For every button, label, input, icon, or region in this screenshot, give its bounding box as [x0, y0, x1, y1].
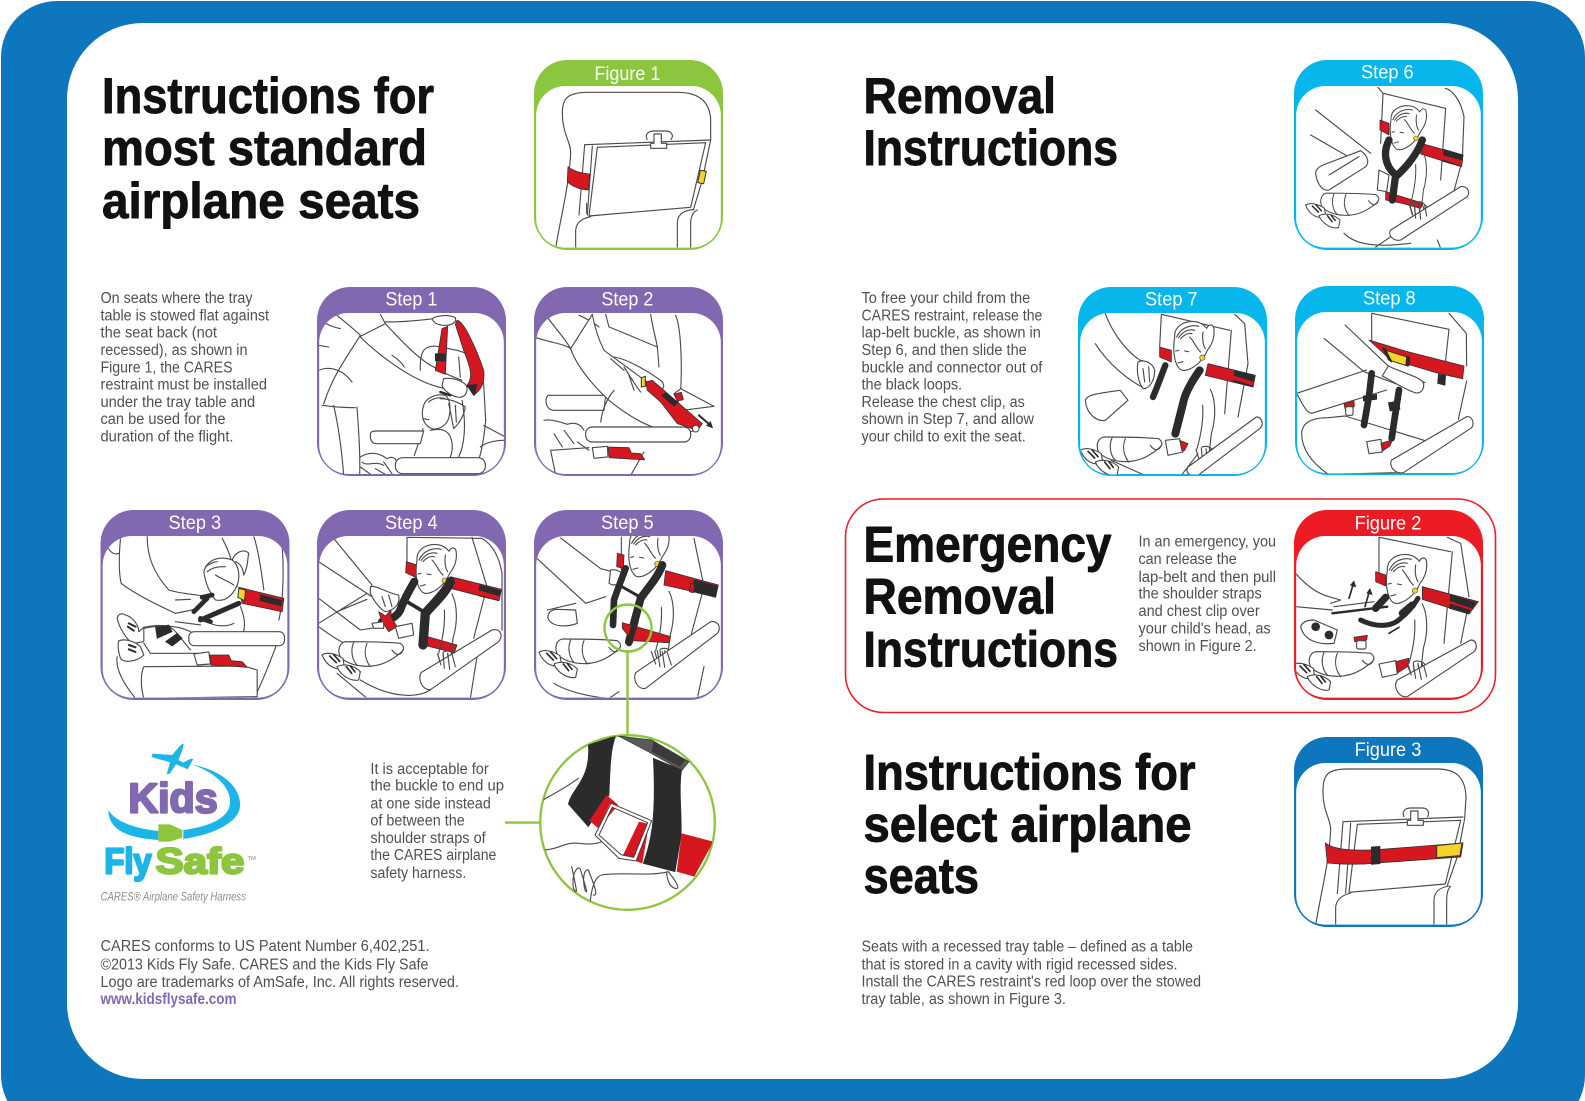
- logo word: Safe: Safe: [156, 840, 244, 881]
- heading: Removal Instructions: Instructions: [864, 120, 1118, 176]
- panel: Step 5: [534, 510, 723, 700]
- panel label: Step 8: [1363, 288, 1416, 309]
- text: removal description: CARES restraint, release the: [862, 308, 1042, 324]
- text: removal description: Step 6, and then slide the: [862, 342, 1027, 359]
- text: buckle note: It is acceptable for: [370, 761, 489, 778]
- heading: Emergency Removal Instructions: Instructions: [864, 622, 1118, 678]
- heading: Emergency Removal Instructions: Removal: [864, 568, 1056, 624]
- heading: Instructions for most standard airplane seats: airplane seats: [102, 173, 420, 229]
- panel label: Step 3: [168, 513, 221, 534]
- panel label: Step 5: [601, 513, 654, 534]
- text: footer copyright: [100, 938, 459, 1008]
- heading: Instructions for most standard airplane seats: Instructions for: [102, 68, 434, 124]
- heading: Instructions for select airplane seats: seats: [864, 848, 979, 904]
- text: removal description: buckle and connector out of: [862, 359, 1043, 376]
- text: emergency description: can release the: [1138, 551, 1237, 568]
- illustration: adult pulling the strap under the tray table: [534, 314, 714, 475]
- text: buckle note: the buckle to end up: [370, 778, 504, 795]
- panel label: Step 7: [1145, 289, 1198, 310]
- panel label: Step 1: [385, 289, 437, 310]
- text: removal description: shown in Step 7, and allow: [862, 411, 1035, 428]
- panel: Step 1: [317, 287, 506, 476]
- illustration: child harnessed with buckle at one side: [536, 528, 719, 699]
- text: footer copyright: ©2013 Kids Fly Safe. CARES and the Kids Fly Safe: [100, 956, 428, 973]
- text: buckle note: shoulder straps of: [370, 830, 486, 847]
- text: emergency description: In an emergency, you: [1138, 534, 1276, 551]
- text: footer copyright: Logo are trademarks of AmSafe, Inc. All rights reserved.: [100, 974, 459, 991]
- text: buckle note: of between the: [370, 813, 465, 830]
- heading: Removal Instructions: Removal: [864, 68, 1056, 124]
- illustration: child front view, connecting the harness buckle: [319, 537, 502, 698]
- text: emergency description: lap-belt and then pull: [1138, 569, 1276, 586]
- text: standard seat description: can be used for the: [100, 411, 226, 428]
- heading: Instructions for select airplane seats: select airplane: [864, 796, 1192, 852]
- trademark: TM: [248, 856, 256, 862]
- text: standard seat description: under the tray table and: [100, 394, 255, 411]
- illustration: pulling straps over child's head: [1292, 537, 1478, 697]
- illustration: recessed tray with red loop around it: [1316, 769, 1466, 925]
- logo word: Kids: Kids: [128, 774, 218, 821]
- heading: Instructions for most standard airplane seats: [102, 68, 434, 229]
- text: removal description: the black loops.: [862, 377, 962, 394]
- logo word: Fly: Fly: [104, 840, 152, 881]
- text: standard seat description: [100, 290, 270, 446]
- text: emergency description: shown in Figure 2.: [1138, 638, 1257, 655]
- panel: Figure 3: [1294, 737, 1483, 927]
- panel: Step 2: [534, 287, 723, 476]
- illustration: seat back with flat tray table: [556, 92, 711, 248]
- panel: Step 7: [1078, 287, 1267, 476]
- panel label: Figure 3: [1355, 740, 1421, 761]
- detail circle: buckle close-up: [540, 735, 715, 910]
- text: buckle note: [370, 761, 504, 882]
- text: emergency description: [1138, 534, 1276, 655]
- heading: Emergency Removal Instructions: [864, 516, 1118, 678]
- panel label: Step 6: [1361, 62, 1414, 83]
- text: removal description: lap-belt buckle, as shown in: [862, 325, 1041, 342]
- text: removal description: Release the chest clip, as: [862, 394, 1025, 411]
- heading: Instructions for most standard airplane seats: most standard: [102, 120, 427, 176]
- text: buckle note: the CARES airplane: [370, 847, 496, 864]
- panel: Step 8: [1295, 286, 1484, 475]
- panel: Figure 2: [1292, 510, 1483, 700]
- logo: Kids Fly Safe: [101, 743, 256, 903]
- heading: Emergency Removal Instructions: Emergency: [864, 516, 1112, 572]
- detail pointer: small green circle and connecting lines: [505, 604, 652, 823]
- text: select seats description: tray table, as shown in Figure 3.: [862, 991, 1066, 1008]
- text: select seats description: that is stored in a cavity with rigid recessed sides.: [862, 956, 1178, 974]
- panel: Step 3: [100, 510, 289, 700]
- text: removal description: To free your child from the: [862, 290, 1030, 307]
- heading: Removal Instructions: [864, 68, 1118, 176]
- illustration: harness released from seat: [1297, 313, 1473, 474]
- panel label: Step 4: [385, 513, 438, 534]
- panel: Step 4: [317, 510, 506, 700]
- text: standard seat description: Figure 1, the CARES: [100, 359, 232, 376]
- logo tagline: CARES® Airplane Safety Harness: [101, 889, 246, 903]
- text: standard seat description: restraint must be installed: [100, 377, 267, 394]
- panel: Figure 1: [534, 60, 723, 250]
- panel: Emergency Removal frame: [846, 499, 1496, 712]
- panel label: Step 2: [601, 289, 653, 310]
- heading: Instructions for select airplane seats: [864, 744, 1196, 904]
- text: emergency description: your child's head, as: [1138, 621, 1271, 638]
- text: removal description: your child to exit the seat.: [862, 428, 1026, 446]
- illustration: releasing the chest clip: [1080, 314, 1262, 476]
- icon: airplane: [152, 743, 193, 774]
- text: standard seat description: the seat back (not: [100, 325, 218, 342]
- text: emergency description: the shoulder straps: [1138, 586, 1262, 602]
- text: standard seat description: table is stowed flat against: [100, 308, 270, 324]
- icon: green buckle: [158, 824, 182, 842]
- illustration: adult threading the red strap above the child: [319, 314, 505, 475]
- text: buckle note: at one side instead: [370, 795, 491, 812]
- icon: belt swoosh: [108, 764, 240, 840]
- panel label: Figure 2: [1355, 513, 1421, 534]
- text: select seats description: Install the CARES restraint's red loop over the stowed: [862, 974, 1201, 991]
- panel: Step 6: [1294, 60, 1483, 250]
- text: select seats description: [862, 938, 1201, 1008]
- text: standard seat description: duration of the flight.: [100, 428, 234, 446]
- illustration: releasing the lap-belt buckle: [1305, 87, 1469, 248]
- text: standard seat description: On seats where the tray: [100, 290, 253, 307]
- panel label: Figure 1: [594, 64, 660, 85]
- text: emergency description: and chest clip over: [1138, 603, 1260, 620]
- text: standard seat description: recessed), as shown in: [100, 342, 248, 359]
- heading: Instructions for select airplane seats: Instructions for: [864, 744, 1196, 800]
- text: buckle note: safety harness.: [370, 865, 466, 882]
- text: footer copyright: CARES conforms to US Patent Number 6,402,251.: [100, 938, 430, 955]
- illustration: child side view being buckled: [107, 537, 284, 698]
- text: removal description: [862, 290, 1043, 446]
- text: select seats description: Seats with a recessed tray table – defined as a table: [862, 938, 1193, 956]
- text: footer copyright: www.kidsflysafe.com: [100, 991, 236, 1008]
